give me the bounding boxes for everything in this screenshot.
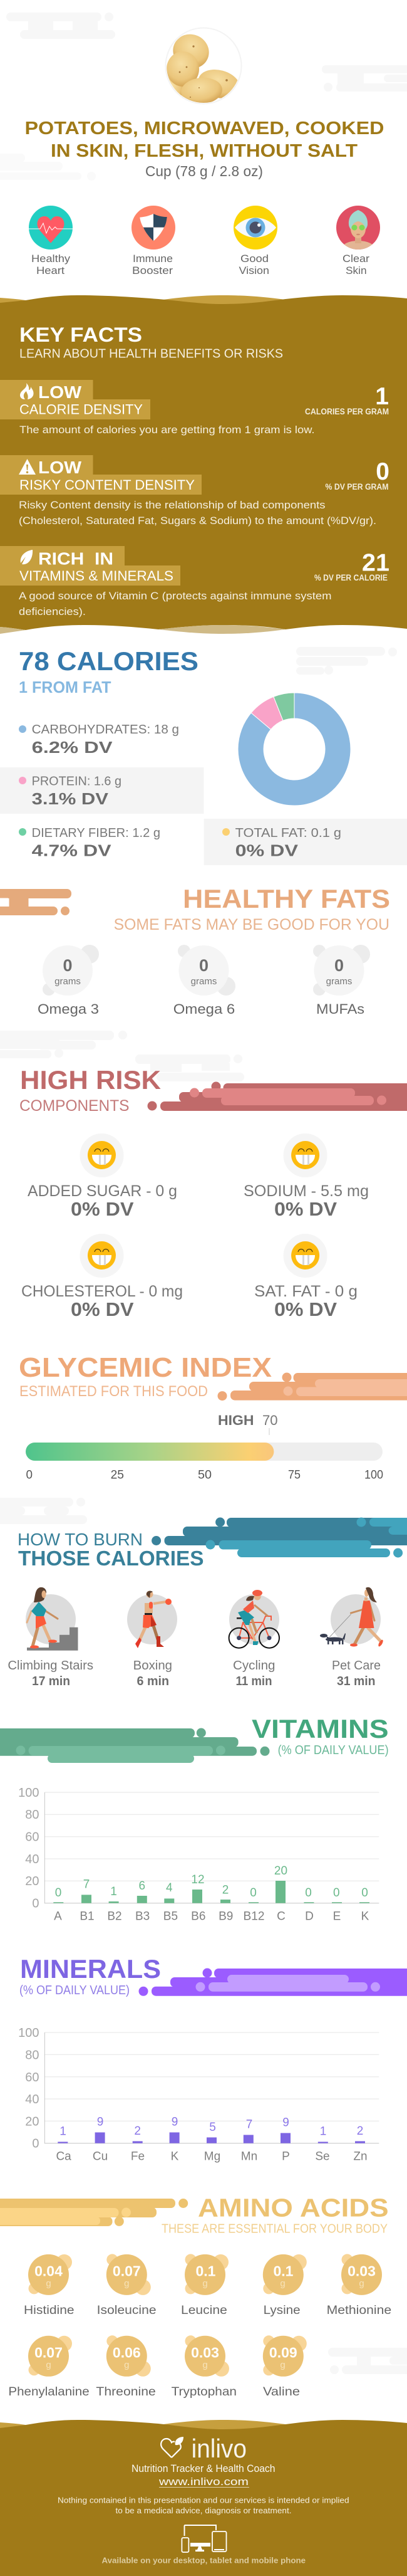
amino: leucine: g	[202, 2278, 208, 2289]
bar values: 1	[110, 1885, 117, 1898]
bar values: 0	[55, 1886, 61, 1900]
decoration: glycemic blob	[218, 1373, 407, 1401]
heading: vitamins: VITAMINS	[252, 1714, 389, 1743]
heading: healthy fats: SOME FATS MAY BE GOOD FOR YOU	[114, 916, 389, 933]
fact: risky content density	[0, 455, 389, 527]
bar values: 6	[139, 1879, 145, 1893]
label: immune booster	[132, 253, 173, 276]
fact: calorie density	[0, 380, 389, 436]
glycemic scale: 0	[26, 1468, 33, 1482]
activity: pet care	[320, 1587, 384, 1647]
activity: climbing stairs	[26, 1587, 78, 1651]
macro: carbohydrates	[19, 723, 179, 757]
macro: total fat: 0% DV	[235, 841, 299, 860]
bar values: 4	[166, 1881, 173, 1895]
glycemic scale: 25	[111, 1468, 124, 1482]
heading: healthy fats	[114, 884, 390, 933]
bar values: 9	[282, 2116, 289, 2129]
bar chart: vitamins	[18, 1786, 379, 1923]
risk: cholesterol	[21, 1234, 183, 1320]
amino: histidine: 0.04	[34, 2263, 63, 2279]
y axis labels	[18, 1786, 39, 1911]
y axis labels: 40	[25, 2093, 39, 2106]
decoration: healthy fats blob	[0, 889, 71, 915]
fact: risky content density: LOW	[38, 458, 82, 477]
stat: mufas: MUFAs	[316, 1001, 364, 1017]
heading: 78 calories: 78 CALORIES	[19, 646, 198, 676]
amino: histidine	[24, 2254, 75, 2317]
amino: tryptophan	[172, 2335, 237, 2399]
icon: immune shield	[131, 206, 175, 250]
category labels: Fe	[131, 2150, 145, 2163]
category labels	[56, 2150, 368, 2163]
amino: isoleucine: 0.07	[113, 2263, 141, 2279]
icon: good vision	[234, 206, 277, 250]
fact: vitamins and minerals: A good source of Vitamin C (protects against immune system	[19, 590, 332, 602]
panel: burn calories	[8, 1517, 407, 1688]
title	[25, 118, 384, 161]
category labels: Se	[315, 2150, 330, 2163]
category labels: Ca	[56, 2150, 71, 2163]
amino: phenylalanine: g	[46, 2360, 51, 2370]
activity: boxing	[127, 1591, 177, 1648]
header panel	[25, 28, 384, 276]
category labels: D	[305, 1910, 314, 1923]
category labels: C	[277, 1910, 286, 1923]
heading: minerals: (% OF DAILY VALUE)	[19, 1984, 130, 1997]
panel: vitamins	[0, 1714, 389, 1923]
title: IN SKIN, FLESH, WITHOUT SALT	[51, 141, 358, 161]
label: boxing: 6 min	[137, 1674, 169, 1688]
label: pet care	[332, 1659, 381, 1688]
heading: high risk	[19, 1065, 161, 1115]
risk: sodium: 0% DV	[274, 1198, 337, 1220]
stat: omega 3: 0	[63, 956, 73, 975]
risk: saturated fat	[254, 1234, 358, 1320]
amino: threonine: Threonine	[96, 2385, 156, 2399]
decoration: vitamins blob	[0, 1728, 269, 1763]
panel: glycemic index	[19, 1352, 407, 1482]
risk: added sugar: ADDED SUGAR - 0 g	[28, 1182, 177, 1200]
icon: healthy heart	[29, 206, 73, 250]
y axis labels: 60	[25, 1831, 39, 1844]
y axis labels: 80	[25, 2049, 39, 2063]
bar values: 9	[172, 2115, 178, 2129]
category labels: B2	[107, 1910, 122, 1923]
bar chart: minerals	[18, 2026, 379, 2163]
stat: mufas	[313, 945, 370, 1017]
category labels: B6	[191, 1910, 205, 1923]
icon: warning	[19, 459, 36, 475]
amino: threonine: 0.06	[113, 2344, 141, 2360]
stat: omega 6: grams	[191, 976, 217, 987]
macro: dietary fiber	[19, 826, 160, 860]
fact: risky content density: (Cholesterol, Saturated Fat, Sugars & Sodium) to the amount (%DV/gr).	[19, 515, 376, 527]
macro: total fat: TOTAL FAT: 0.1 g	[235, 826, 341, 840]
macro: total fat	[204, 819, 407, 865]
title: POTATOES, MICROWAVED, COOKED	[25, 118, 384, 139]
fact: risky content density: RISKY CONTENT DENSITY	[19, 477, 195, 493]
category labels: Zn	[353, 2150, 368, 2163]
y axis labels: 100	[18, 1786, 39, 1800]
risk: cholesterol: 0% DV	[71, 1298, 134, 1320]
macro: dietary fiber: DIETARY FIBER: 1.2 g	[32, 826, 160, 840]
stat: omega 3: Omega 3	[38, 1001, 99, 1017]
icon: leaf	[21, 550, 33, 564]
category labels: B9	[219, 1910, 233, 1923]
label: healthy heart: Heart	[36, 265, 64, 276]
heading: how to burn those calories: HOW TO BURN	[18, 1530, 143, 1549]
panel: key facts	[0, 295, 407, 634]
activity: cycling	[229, 1590, 279, 1648]
category labels: E	[333, 1910, 341, 1923]
risk: saturated fat: 0% DV	[274, 1298, 337, 1320]
decoration: minerals blob	[139, 1969, 407, 1996]
macro: dietary fiber: 4.7% DV	[32, 841, 111, 860]
fact: vitamins and minerals	[0, 546, 389, 618]
category labels: B1	[80, 1910, 95, 1923]
heading: glycemic index	[19, 1352, 272, 1400]
amino: valine: Valine	[263, 2385, 300, 2399]
label: climbing stairs: Climbing Stairs	[8, 1659, 93, 1673]
label: climbing stairs	[8, 1659, 93, 1688]
decoration: burn blob	[152, 1517, 407, 1557]
fact: calorie density: The amount of calories you are getting from 1 gram is low.	[19, 424, 315, 436]
risk: added sugar: 0% DV	[71, 1198, 134, 1220]
tagline and url: Nutrition Tracker & Health Coach	[131, 2463, 276, 2474]
category labels: Cu	[93, 2150, 108, 2163]
heading: vitamins: (% OF DAILY VALUE)	[278, 1743, 389, 1757]
risk: added sugar	[28, 1133, 177, 1220]
fact: calorie density: CALORIES PER GRAM	[305, 407, 389, 416]
tagline and url: www.inlivo.com	[158, 2476, 249, 2488]
heading: 78 calories: 1 FROM FAT	[19, 678, 111, 697]
heading: vitamins	[252, 1714, 389, 1757]
bar values: 5	[209, 2121, 216, 2134]
y axis labels: 40	[25, 1853, 39, 1866]
amino: phenylalanine: 0.07	[34, 2344, 63, 2360]
macro: protein: 3.1% DV	[32, 789, 109, 808]
amino: lysine: Lysine	[264, 2304, 301, 2317]
panel: high risk	[19, 1065, 407, 1320]
bars	[53, 1881, 369, 1903]
icon: flame	[20, 383, 34, 399]
heading: amino acids: AMINO ACIDS	[198, 2193, 389, 2222]
category labels: K	[361, 1910, 369, 1923]
decoration: high risk blob	[148, 1082, 407, 1111]
disclaimer	[58, 2495, 349, 2515]
amino: lysine: 0.1	[274, 2263, 294, 2279]
stat: omega 3: grams	[54, 976, 81, 987]
heading: minerals: MINERALS	[20, 1954, 161, 1984]
donut chart	[238, 693, 351, 806]
amino: threonine	[96, 2335, 156, 2399]
label: boxing	[133, 1659, 172, 1688]
category labels: B5	[163, 1910, 178, 1923]
amino: leucine	[181, 2254, 229, 2317]
label: clear skin: Skin	[346, 265, 367, 276]
amino: leucine: Leucine	[181, 2304, 227, 2317]
label: pet care: 31 min	[337, 1674, 376, 1688]
amino: isoleucine: g	[124, 2278, 129, 2289]
bar values: 2	[222, 1883, 229, 1897]
bar values: 9	[97, 2115, 103, 2129]
label: healthy heart	[31, 253, 71, 276]
amino: methionine: g	[359, 2278, 364, 2289]
risk: saturated fat: SAT. FAT - 0 g	[254, 1283, 358, 1300]
fact: calorie density: CALORIE DENSITY	[19, 401, 143, 418]
amino: tryptophan: 0.03	[191, 2344, 219, 2360]
bar values: 1	[320, 2125, 326, 2138]
heading: how to burn those calories	[18, 1530, 204, 1570]
amino: leucine: 0.1	[196, 2263, 216, 2279]
disclaimer: Nothing contained in this presentation and our services is intended or implied	[58, 2495, 349, 2505]
y axis labels: 100	[18, 2026, 39, 2040]
amino: lysine: g	[280, 2278, 286, 2289]
footer	[0, 2420, 407, 2576]
panel: calories	[0, 646, 407, 865]
category labels	[54, 1910, 369, 1923]
amino: tryptophan: Tryptophan	[172, 2385, 237, 2399]
glycemic scale: 50	[198, 1468, 212, 1482]
amino: phenylalanine	[8, 2336, 90, 2399]
category labels: A	[54, 1910, 62, 1923]
heading: glycemic index: GLYCEMIC INDEX	[19, 1352, 272, 1383]
glycemic marker: 70	[262, 1412, 278, 1428]
amino: methionine: Methionine	[327, 2304, 391, 2317]
amino: lysine	[263, 2254, 307, 2317]
decoration: amino blob	[0, 2199, 188, 2226]
amino: isoleucine: Isoleucine	[97, 2304, 157, 2317]
tagline and url	[131, 2463, 276, 2488]
amino: methionine: 0.03	[348, 2263, 376, 2279]
bar values: 12	[191, 1873, 205, 1886]
fact: vitamins and minerals: deficiencies).	[19, 606, 86, 618]
label: cycling	[233, 1659, 276, 1688]
fact: risky content density: % DV PER GRAM	[326, 482, 388, 492]
amino: valine: g	[280, 2360, 286, 2370]
macro: carbohydrates: 6.2% DV	[32, 738, 113, 757]
fact: risky content density: Risky Content density is the relationship of bad components	[19, 499, 326, 511]
heading: key facts	[19, 323, 283, 361]
label: healthy heart: Healthy	[31, 253, 71, 265]
heading: glycemic index: ESTIMATED FOR THIS FOOD	[19, 1383, 208, 1400]
amino: histidine: Histidine	[24, 2304, 75, 2317]
category labels: Mg	[204, 2150, 220, 2163]
availability note: Available on your desktop, tablet and mobile phone	[101, 2556, 306, 2565]
label: pet care: Pet Care	[332, 1659, 381, 1673]
bar values: 0	[361, 1886, 368, 1900]
fact: vitamins and minerals: VITAMINS & MINERALS	[19, 568, 173, 584]
bar values	[59, 2115, 363, 2138]
y axis labels: 0	[32, 1897, 39, 1911]
heading: amino acids: THESE ARE ESSENTIAL FOR YOUR BODY	[162, 2222, 388, 2236]
fact: calorie density: LOW	[38, 382, 82, 402]
category labels: Mn	[241, 2150, 257, 2163]
panel: healthy fats	[0, 884, 390, 1017]
y axis labels: 0	[32, 2137, 39, 2150]
category labels: P	[282, 2150, 290, 2163]
heading: high risk: HIGH RISK	[20, 1065, 161, 1095]
amino: tryptophan: g	[202, 2360, 208, 2370]
heading: healthy fats: HEALTHY FATS	[183, 884, 390, 913]
food image: potatoes	[164, 28, 244, 106]
glycemic scale: 75	[288, 1468, 301, 1482]
risk: sodium	[244, 1133, 369, 1220]
y axis labels: 20	[25, 1874, 39, 1888]
y axis labels: 60	[25, 2071, 39, 2084]
fact: calorie density: 1	[375, 383, 389, 410]
macro: protein: PROTEIN: 1.6 g	[32, 775, 121, 789]
label: cycling: Cycling	[233, 1659, 276, 1673]
amino: valine: 0.09	[269, 2344, 297, 2360]
fact: vitamins and minerals: RICH IN	[38, 549, 113, 568]
amino: isoleucine	[97, 2254, 157, 2317]
icon: clear skin	[336, 206, 380, 250]
logo: inlivo	[161, 2434, 247, 2463]
amino: threonine: g	[124, 2360, 129, 2370]
stat: omega 3	[38, 945, 99, 1017]
heading: amino acids	[162, 2193, 389, 2236]
risk: cholesterol: CHOLESTEROL - 0 mg	[21, 1283, 183, 1300]
panel: amino acids	[0, 2193, 391, 2399]
label: clear skin: Clear	[343, 253, 369, 265]
bars	[58, 2132, 365, 2143]
stat: omega 6: 0	[199, 956, 209, 975]
category labels: B3	[135, 1910, 150, 1923]
amino: methionine	[327, 2254, 391, 2317]
label: good vision	[239, 253, 269, 276]
heading: minerals	[19, 1954, 161, 1997]
y axis labels: 80	[25, 1808, 39, 1822]
heading: key facts: LEARN ABOUT HEALTH BENEFITS OR RISKS	[19, 347, 283, 361]
bar values: 2	[357, 2125, 363, 2138]
logo: inlivo: inlivo	[192, 2434, 247, 2463]
heading: high risk: COMPONENTS	[19, 1097, 129, 1115]
y axis labels	[18, 2026, 39, 2150]
amino: histidine: g	[46, 2278, 51, 2289]
bar values: 2	[134, 2125, 141, 2138]
bar values	[55, 1864, 368, 1900]
glycemic bar	[26, 1443, 383, 1461]
label: boxing: Boxing	[133, 1659, 172, 1673]
stat: omega 6: Omega 6	[173, 1001, 235, 1017]
glycemic scale	[26, 1468, 383, 1482]
glycemic marker	[218, 1412, 278, 1435]
label: good vision: Good	[240, 253, 269, 265]
amino: valine	[263, 2335, 307, 2399]
heading: key facts: KEY FACTS	[19, 323, 142, 346]
serving size: Cup (78 g / 2.8 oz)	[145, 163, 263, 179]
label: climbing stairs: 17 min	[32, 1674, 70, 1688]
disclaimer: to be a medical advice, diagnosis or treatment.	[115, 2506, 292, 2515]
heading: 78 calories	[19, 646, 198, 697]
bar values: 0	[305, 1886, 312, 1900]
heading: how to burn those calories: THOSE CALORIES	[18, 1547, 204, 1570]
category labels: K	[171, 2150, 179, 2163]
label: clear skin	[343, 253, 369, 276]
glycemic scale: 100	[364, 1468, 383, 1482]
bar values: 7	[246, 2118, 252, 2131]
stat: omega 6	[173, 945, 235, 1017]
label: good vision: Vision	[239, 265, 269, 276]
stat: mufas: grams	[326, 976, 352, 987]
macro: protein	[0, 767, 204, 814]
macro: carbohydrates: CARBOHYDRATES: 18 g	[32, 723, 179, 737]
stat: mufas: 0	[334, 956, 344, 975]
amino: phenylalanine: Phenylalanine	[8, 2385, 90, 2399]
bar values: 0	[250, 1886, 257, 1900]
category labels: B12	[243, 1910, 264, 1923]
glycemic marker: HIGH	[218, 1412, 254, 1428]
label: immune booster: Booster	[132, 265, 173, 276]
label: immune booster: Immune	[133, 253, 173, 265]
fact: vitamins and minerals: % DV PER CALORIE	[314, 573, 388, 582]
risk: sodium: SODIUM - 5.5 mg	[244, 1182, 369, 1200]
panel: minerals	[18, 1954, 407, 2163]
fact: risky content density: 0	[376, 458, 389, 485]
icon: devices	[182, 2525, 227, 2552]
bar values: 20	[274, 1864, 287, 1878]
label: cycling: 11 min	[235, 1674, 272, 1688]
fact: vitamins and minerals: 21	[362, 549, 389, 577]
bar values: 7	[83, 1878, 90, 1891]
bar values: 1	[59, 2125, 66, 2138]
y axis labels: 20	[25, 2115, 39, 2129]
bar values: 0	[333, 1886, 340, 1900]
